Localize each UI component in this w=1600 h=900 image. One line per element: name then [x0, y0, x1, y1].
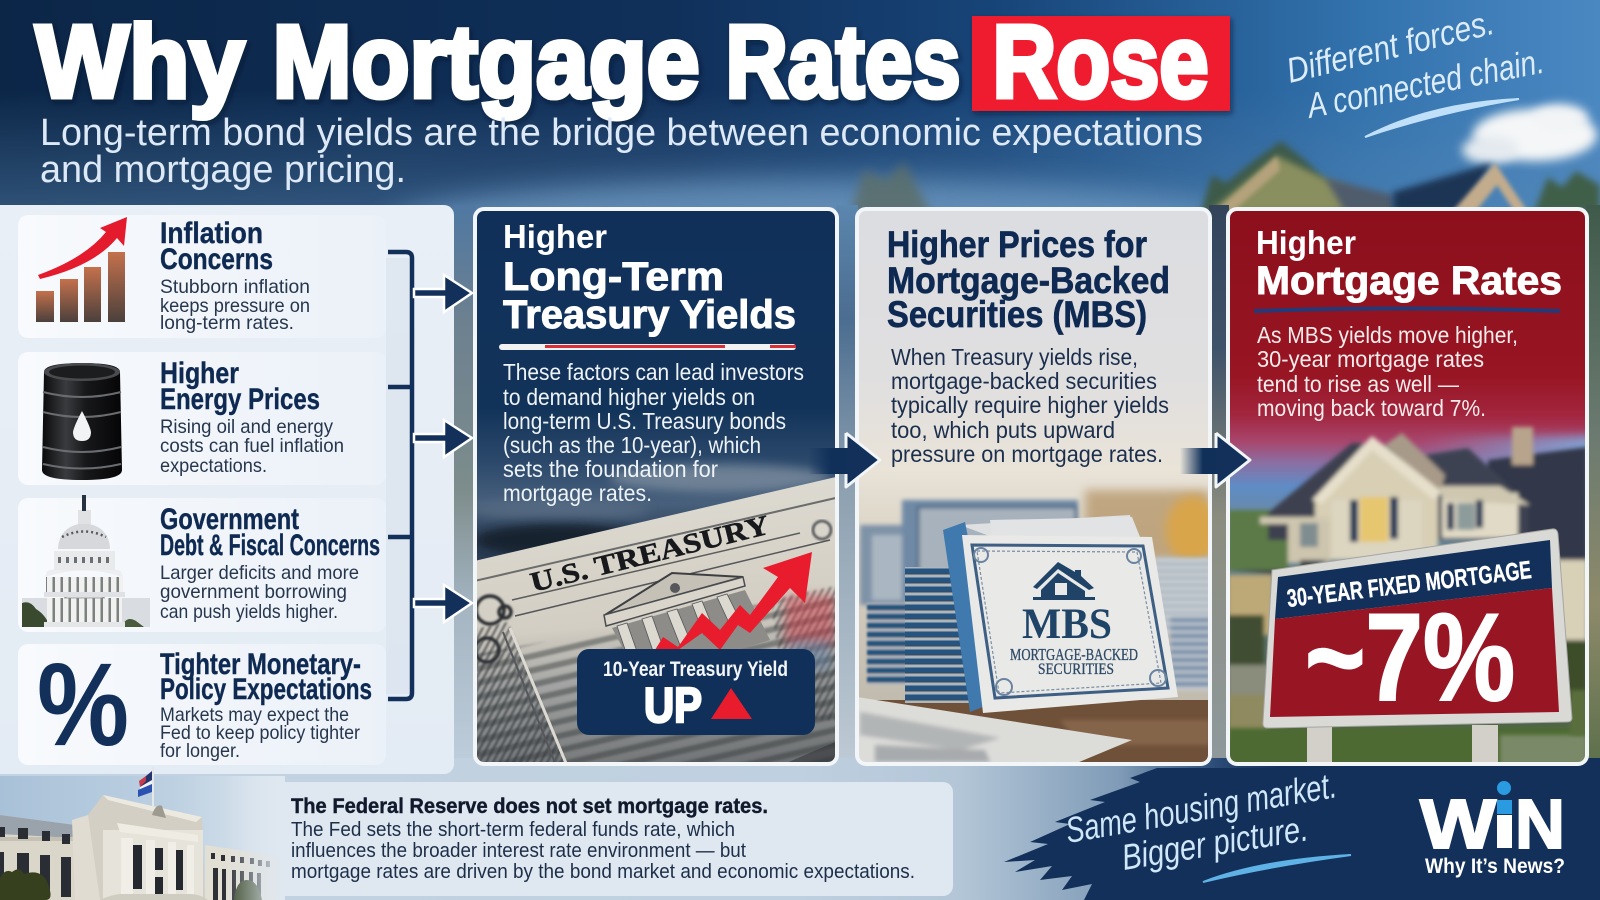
heading underline — [499, 344, 796, 350]
panel: mortgage-backed securities: Higher Prices for — [887, 224, 1147, 265]
icon: flag — [138, 767, 153, 806]
card: inflation concerns: Stubborn inflation — [160, 276, 310, 298]
subtitle — [40, 112, 1203, 191]
panel: mortgage-backed securities: When Treasury yields rise, — [891, 344, 1138, 370]
panel: mortgage-backed securities: mortgage-backed securities — [891, 368, 1157, 394]
card: higher energy prices: Rising oil and energy — [160, 416, 333, 438]
image: MBS certificates: MORTGAGE-BACKED — [1010, 645, 1138, 664]
icon: capitol building — [22, 495, 150, 627]
arrow: factors to yields 3 — [414, 585, 472, 622]
image: federal reserve building — [0, 776, 290, 900]
panel: higher mortgage rates: moving back toward 7%. — [1257, 395, 1486, 421]
logo: WIN: W — [1420, 785, 1496, 863]
panel: mortgage-backed securities: Mortgage-Backed — [887, 260, 1170, 301]
panel: higher mortgage rates: tend to rise as well — — [1257, 371, 1459, 397]
panel: federal reserve note — [0, 767, 953, 900]
panel: federal reserve note: mortgage rates are driven by the bond market and economic expectations. — [291, 860, 915, 883]
logo: WIN: N — [1515, 785, 1565, 863]
card: higher energy prices: Higher — [160, 357, 239, 390]
title: Rates — [726, 4, 960, 119]
card: government debt: can push yields higher. — [160, 601, 338, 623]
panel: higher mortgage rates: Mortgage Rates — [1256, 259, 1562, 303]
panel: mortgage-backed securities: pressure on mortgage rates. — [891, 441, 1163, 467]
card: tighter monetary policy — [18, 639, 386, 771]
title highlight: Rose: Rose — [992, 4, 1208, 119]
card: tighter monetary policy: Markets may expect the — [160, 704, 349, 726]
icon: rising bars and arrow — [36, 217, 127, 322]
panel: treasury yields: to demand higher yields on — [503, 384, 755, 410]
icon: house logo — [1033, 562, 1095, 600]
panel: treasury yields: Treasury Yields — [503, 293, 796, 337]
panel: treasury yields: sets the foundation for — [503, 456, 718, 482]
image: treasury note: U.S. TREASURY — [527, 510, 773, 599]
card: inflation concerns: Inflation — [160, 217, 263, 250]
panel: treasury yields: long-term U.S. Treasury bonds — [503, 408, 786, 434]
panel: mortgage-backed securities: too, which puts upward — [891, 417, 1115, 443]
card: government debt — [18, 495, 386, 632]
title: Why — [36, 4, 244, 119]
card: higher energy prices: expectations. — [160, 455, 267, 477]
card: tighter monetary policy: Tighter Monetary- — [160, 648, 361, 681]
callout: 10-year yield: UP — [644, 679, 702, 733]
image: house — [1228, 427, 1587, 765]
tagline: Bigger picture. — [1119, 807, 1311, 878]
card: higher energy prices: costs can fuel inflation — [160, 435, 344, 457]
sign: 30-year fixed mortgage: ~7% — [1305, 589, 1515, 727]
red zigzag arrow — [655, 552, 812, 650]
logo: WIN: Why It’s News? — [1425, 855, 1565, 878]
arrow: MBS to mortgage rates — [1180, 433, 1250, 487]
panel: mortgage-backed securities: Securities (MBS) — [887, 294, 1147, 335]
panel: causes — [0, 205, 454, 774]
heading underline — [1254, 308, 1560, 311]
panel: federal reserve note: influences the broader interest rate environment — but — [291, 839, 746, 862]
tagline — [1062, 764, 1339, 878]
card: tighter monetary policy: for longer. — [160, 740, 240, 762]
connector bracket — [388, 252, 412, 699]
tagline: Same housing market. — [1062, 764, 1339, 851]
card: government debt: Debt & Fiscal Concerns — [160, 529, 380, 562]
icon: oil barrel — [42, 363, 122, 480]
engraved building — [603, 572, 770, 649]
panel: federal reserve note: The Fed sets the short-term federal funds rate, which — [291, 818, 735, 841]
sign: 30-year fixed mortgage — [1263, 529, 1572, 767]
arrow: factors to yields 2 — [414, 420, 472, 457]
card: inflation concerns: long-term rates. — [160, 312, 294, 334]
card: inflation concerns: keeps pressure on — [160, 295, 310, 317]
image: MBS certificates: SECURITIES — [1038, 661, 1114, 678]
panel: treasury yields: Long-Term — [503, 255, 724, 299]
card: government debt: government borrowing — [160, 581, 347, 603]
callout: 10-year yield: 10-Year Treasury Yield — [603, 658, 788, 681]
brush stroke panel — [1004, 764, 1600, 900]
panel: treasury yields — [470, 209, 840, 770]
panel: mortgage-backed securities — [857, 209, 1218, 765]
panel: higher mortgage rates: 30-year mortgage rates — [1257, 346, 1484, 372]
panel: federal reserve note: The Federal Reserve does not set mortgage rates. — [291, 795, 768, 818]
card: higher energy prices: Energy Prices — [160, 383, 320, 416]
panel: treasury yields: (such as the 10-year), which — [503, 432, 761, 458]
image: MBS certificates — [857, 500, 1210, 765]
panel: treasury yields: Higher — [503, 218, 607, 255]
arrow: yields to MBS — [808, 433, 880, 487]
bottom strip background — [0, 758, 1600, 900]
card: higher energy prices — [18, 352, 386, 485]
card: tighter monetary policy: Policy Expectations — [160, 673, 372, 706]
card: government debt: Government — [160, 503, 299, 536]
subtitle: Long-term bond yields are the bridge between economic expectations — [40, 112, 1203, 154]
panel: higher mortgage rates: As MBS yields move higher, — [1257, 322, 1518, 348]
callout: 10-year yield — [577, 649, 815, 735]
card: inflation concerns — [18, 215, 386, 338]
icon: percent sign: % — [37, 639, 129, 771]
panel: treasury yields: mortgage rates. — [503, 480, 652, 506]
arrow: factors to yields 1 — [414, 275, 472, 312]
handwritten note: different forces: A connected chain. — [1302, 42, 1547, 126]
logo: WIN — [1420, 781, 1565, 878]
panel: mortgage-backed securities: typically require higher yields — [891, 392, 1169, 418]
title — [36, 4, 1230, 119]
image: treasury note — [470, 476, 840, 770]
handwritten note: different forces — [1283, 3, 1547, 137]
card: inflation concerns: Concerns — [160, 243, 273, 276]
panel: higher mortgage rates: Higher — [1256, 224, 1356, 261]
panel: higher mortgage rates — [1228, 209, 1595, 767]
card: tighter monetary policy: Fed to keep policy tighter — [160, 722, 360, 744]
card: government debt: Larger deficits and more — [160, 562, 359, 584]
title: Mortgage — [272, 4, 700, 119]
panel: treasury yields: These factors can lead investors — [503, 359, 804, 385]
image: MBS certificates: MBS — [1022, 601, 1112, 648]
subtitle: and mortgage pricing. — [40, 149, 406, 191]
